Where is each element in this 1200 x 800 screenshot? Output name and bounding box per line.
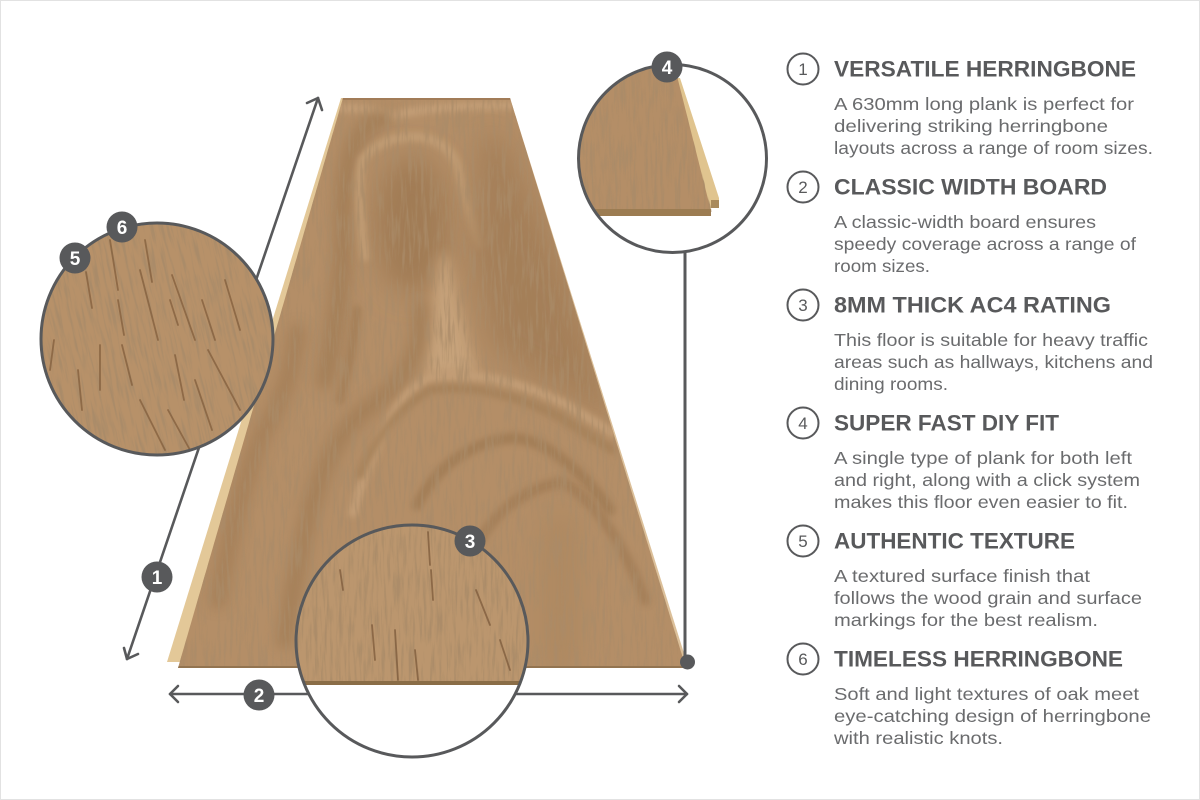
feature 1: versatile herringbone: layouts across a range of room sizes.	[834, 138, 1153, 158]
feature 2: classic width board: 2	[798, 178, 808, 197]
feature 5: authentic texture: markings for the best realism.	[834, 610, 1098, 630]
width arrow	[170, 686, 687, 702]
marker 4: 4	[662, 58, 673, 79]
plank	[160, 90, 700, 680]
feature 4: super fast DIY fit: A single type of plank for both left	[834, 448, 1132, 468]
feature 3: 8mm thick AC4 rating	[788, 290, 1153, 394]
marker 4	[652, 52, 682, 82]
marker 6: 6	[117, 218, 127, 239]
pointer line	[680, 252, 695, 670]
feature 6: timeless herringbone: with realistic knots.	[833, 728, 1003, 748]
marker 1: 1	[152, 568, 163, 589]
feature 1: versatile herringbone: delivering striking herringbone	[834, 116, 1108, 136]
length arrow	[124, 98, 322, 659]
feature 5: authentic texture: 5	[798, 532, 808, 551]
marker 5	[60, 242, 90, 274]
magnifier: thickness detail	[290, 520, 535, 757]
feature 3: 8mm thick AC4 rating: 3	[798, 296, 808, 315]
feature 1: versatile herringbone: 1	[798, 60, 808, 79]
marker 1	[142, 562, 172, 592]
feature 3: 8mm thick AC4 rating: areas such as hallways, kitchens and	[834, 352, 1153, 372]
marker 6	[106, 212, 138, 242]
feature 4: super fast DIY fit: and right, along with a click system	[834, 470, 1140, 490]
marker 5: 5	[70, 249, 81, 270]
feature 4: super fast DIY fit: makes this floor even easier to fit.	[834, 492, 1128, 512]
feature 3: 8mm thick AC4 rating: This floor is suitable for heavy traffic	[834, 330, 1148, 350]
marker 2	[244, 680, 274, 710]
feature 4: super fast DIY fit: 4	[798, 414, 808, 433]
feature 6: timeless herringbone: 6	[798, 650, 808, 669]
marker 2: 2	[254, 686, 264, 707]
feature 6: timeless herringbone: eye-catching design of herringbone	[834, 706, 1151, 726]
feature 2: classic width board: room sizes.	[834, 256, 930, 276]
feature 5: authentic texture: A textured surface finish that	[834, 566, 1090, 586]
magnifier: texture detail	[40, 222, 274, 456]
feature 5: authentic texture: follows the wood grain and surface	[834, 588, 1142, 608]
magnified face	[580, 68, 710, 209]
feature 1: versatile herringbone: VERSATILE HERRINGBONE	[834, 56, 1136, 82]
feature 4: super fast DIY fit	[788, 408, 1140, 512]
feature 6: timeless herringbone: TIMELESS HERRINGBONE	[834, 646, 1123, 672]
feature 5: authentic texture: AUTHENTIC TEXTURE	[834, 528, 1075, 554]
feature 2: classic width board: speedy coverage across a range of	[834, 234, 1136, 254]
feature 2: classic width board: A classic-width board ensures	[834, 212, 1096, 232]
feature 2: classic width board	[788, 172, 1136, 276]
marker 3	[454, 526, 486, 556]
feature 3: 8mm thick AC4 rating: dining rooms.	[834, 374, 948, 394]
feature 1: versatile herringbone	[788, 54, 1153, 158]
feature 3: 8mm thick AC4 rating: 8MM THICK AC4 RATING	[834, 292, 1111, 318]
feature 2: classic width board: CLASSIC WIDTH BOARD	[834, 174, 1107, 200]
plank side edge	[167, 98, 344, 662]
feature 5: authentic texture	[788, 526, 1142, 630]
feature 4: super fast DIY fit: SUPER FAST DIY FIT	[834, 410, 1060, 436]
feature 6: timeless herringbone: Soft and light textures of oak meet	[834, 684, 1139, 704]
feature 1: versatile herringbone: A 630mm long plank is perfect for	[834, 94, 1134, 114]
magnified side edge	[678, 78, 719, 208]
magnifier: click edge detail	[560, 60, 766, 252]
plank face	[160, 90, 700, 680]
feature 6: timeless herringbone	[788, 644, 1151, 748]
marker 3: 3	[465, 532, 475, 553]
